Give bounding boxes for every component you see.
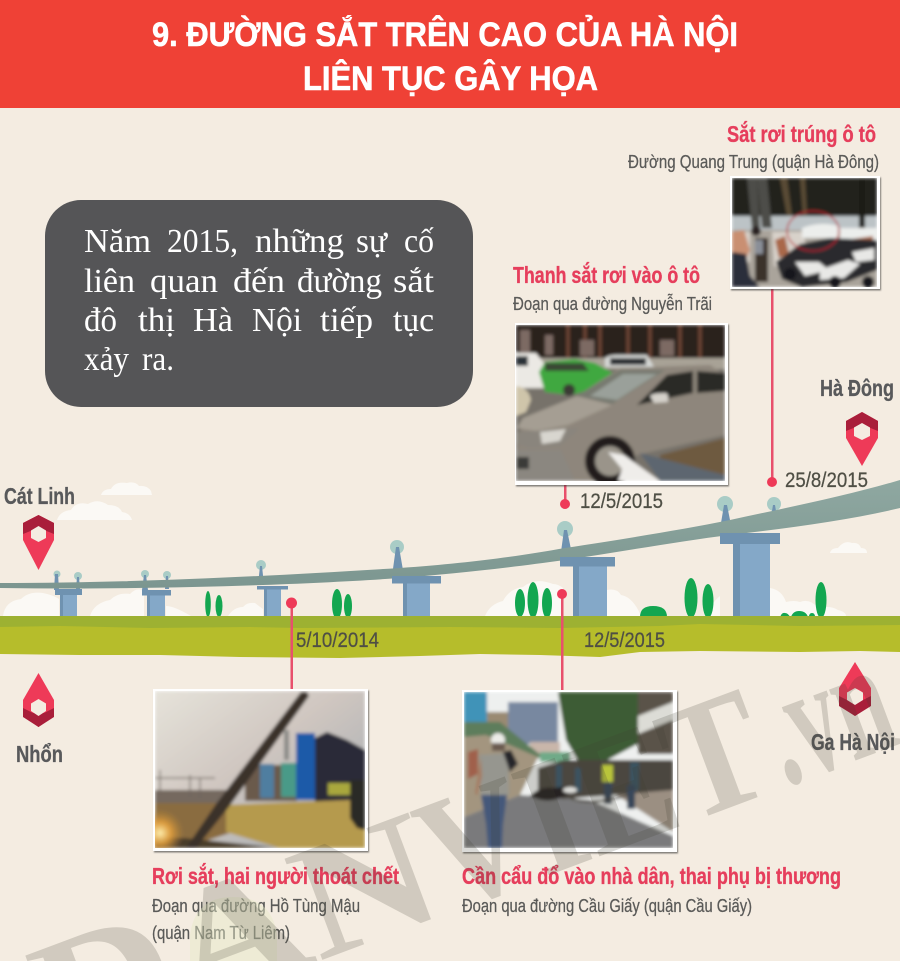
photo: motorbikes and car on Quang Trung — [730, 176, 880, 289]
intro text box: cố — [404, 223, 434, 260]
caption: Thanh sắt rơi vào ô tô — [513, 261, 712, 314]
intro text box: liên — [84, 263, 135, 300]
caption: Rơi sắt, hai người thoát chết: Rơi sắt, hai người thoát chết — [152, 862, 399, 889]
marker: 25/8/2015 — [767, 289, 868, 492]
clouds — [3, 482, 867, 616]
photo: collapsed crane on Cầu Giấy — [462, 690, 677, 852]
intro text box: sắt — [393, 263, 435, 300]
title banner — [0, 0, 900, 108]
intro text box: Hà — [193, 302, 233, 339]
piers — [55, 533, 780, 617]
caption: Sắt rơi trúng ô tô — [628, 120, 879, 172]
marker: 12/5/2015 lower — [557, 589, 665, 690]
viaduct deck — [0, 480, 900, 588]
pin: Cát Linh: Cát Linh — [4, 483, 75, 509]
caption: Cần cẩu đổ vào nhà dân — [462, 863, 841, 916]
intro text box: ra. — [142, 341, 174, 378]
intro text box: 2015, — [167, 223, 238, 260]
pin: Cát Linh — [4, 483, 75, 570]
caption: Cần cẩu đổ vào nhà dân: Đoạn qua đường Cầu Giấy (quận Cầu Giấy) — [462, 896, 752, 916]
caption: Rơi sắt, hai người thoát chết: Đoạn qua đường Hồ Tùng Mậu — [152, 896, 360, 916]
intro text box: sự — [356, 223, 389, 260]
intro text box: tiếp — [320, 302, 373, 339]
pin: Ga Hà Nội — [811, 662, 895, 755]
intro text box: Nội — [252, 302, 302, 339]
intro text box: đô — [84, 302, 117, 339]
intro text box: Năm — [84, 223, 151, 260]
title banner: LIÊN TỤC GÂY HỌA — [303, 60, 598, 98]
elevated railway — [0, 480, 900, 617]
marker: 12/5/2015 upper — [560, 484, 663, 513]
intro text box: đường — [297, 263, 382, 300]
marker: 5/10/2014: 5/10/2014 — [296, 629, 379, 652]
caption: Thanh sắt rơi vào ô tô: Thanh sắt rơi vào ô tô — [513, 261, 700, 288]
intro text box: đến — [233, 263, 285, 300]
pin: Nhổn: Nhổn — [16, 741, 63, 767]
intro text box: tục — [393, 302, 434, 339]
intro text box — [45, 200, 473, 407]
caption: Thanh sắt rơi vào ô tô: Đoạn qua đường Nguyễn Trãi — [513, 293, 712, 314]
marker: 12/5/2015 lower: 12/5/2015 — [584, 629, 665, 652]
lamp posts — [54, 496, 781, 590]
caption: Rơi sắt, hai người thoát chết: (quận Nam Từ Liêm) — [152, 923, 290, 943]
marker: 12/5/2015 upper: 12/5/2015 — [580, 490, 663, 513]
intro text box: quan — [150, 263, 218, 300]
photo: fallen iron bar on Hồ Tùng Mậu — [136, 689, 368, 857]
trees — [205, 578, 826, 619]
intro text box: xảy — [84, 341, 129, 378]
pin: Hà Đông — [820, 375, 894, 466]
intro text box: thị — [138, 302, 175, 339]
photo: grey car on Nguyễn Trãi — [515, 323, 728, 486]
marker: 25/8/2015: 25/8/2015 — [785, 469, 868, 492]
caption: Rơi sắt, hai người thoát chết — [152, 862, 399, 943]
pin: Nhổn — [16, 673, 63, 767]
title banner: 9. ĐƯỜNG SẮT TRÊN CAO CỦA HÀ NỘI — [152, 15, 738, 54]
intro text box: những — [255, 223, 344, 260]
marker: 5/10/2014 — [286, 598, 379, 689]
watermark logo tint — [190, 897, 277, 961]
ground strip — [0, 616, 900, 658]
watermark: VIET — [394, 652, 791, 947]
